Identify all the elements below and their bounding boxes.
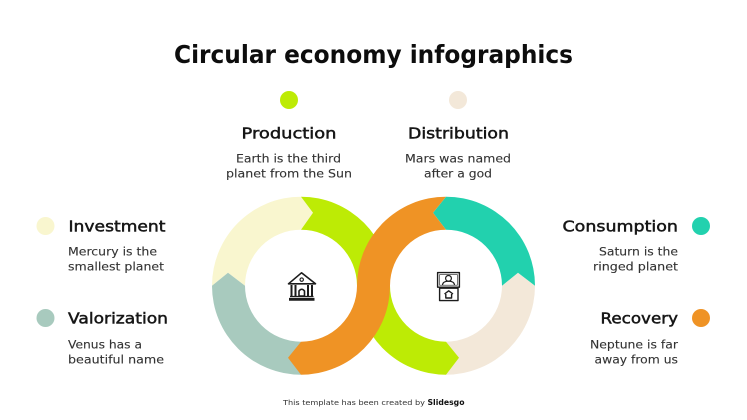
production description: Earth is the third (236, 152, 341, 166)
consumption marker dot (692, 217, 710, 235)
recovery description (590, 338, 678, 367)
panel: consumption (562, 217, 710, 274)
consumption description: Saturn is the (599, 245, 678, 259)
recovery marker dot (692, 309, 710, 327)
consumption description: ringed planet (593, 260, 678, 274)
segment: distribution beige arc (446, 273, 535, 375)
production description (226, 152, 352, 181)
investment description: smallest planet (68, 260, 164, 274)
segment: valorization sage arc (212, 273, 301, 375)
infinity loop diagram (212, 197, 535, 375)
panel: distribution (405, 91, 511, 181)
footer credit: This template has been created by (282, 398, 426, 407)
icon: kiosk with attendant (438, 273, 459, 301)
panel: production (226, 91, 352, 181)
distribution description (405, 152, 511, 181)
distribution description: after a god (424, 167, 492, 181)
valorization heading: Valorization (68, 309, 168, 327)
distribution marker dot (449, 91, 467, 109)
valorization description: beautiful name (68, 353, 164, 367)
production heading: Production (242, 124, 336, 142)
production description: planet from the Sun (226, 167, 352, 181)
distribution description: Mars was named (405, 152, 511, 166)
valorization marker dot (36, 309, 54, 327)
panel: valorization (36, 309, 168, 367)
recovery description: away from us (594, 353, 678, 367)
recovery heading: Recovery (600, 309, 678, 327)
panel: recovery (590, 309, 710, 367)
consumption description (593, 245, 678, 274)
distribution heading: Distribution (408, 124, 509, 142)
investment description (68, 245, 164, 274)
recovery description: Neptune is far (590, 338, 678, 352)
icon: bank building (288, 273, 316, 299)
valorization description (68, 338, 164, 367)
footer credit: Slidesgo (428, 398, 465, 407)
investment marker dot (36, 217, 54, 235)
valorization description: Venus has a (68, 338, 142, 352)
segment: consumption teal arc (433, 197, 535, 286)
panel: investment (36, 217, 166, 274)
title: Circular economy infographics (174, 40, 573, 69)
consumption heading: Consumption (562, 217, 678, 235)
investment description: Mercury is the (68, 245, 157, 259)
segment: investment cream arc (212, 197, 313, 286)
segment: production green band (301, 197, 459, 375)
investment heading: Investment (68, 217, 166, 235)
segment: recovery orange band (288, 197, 446, 375)
production marker dot (280, 91, 298, 109)
